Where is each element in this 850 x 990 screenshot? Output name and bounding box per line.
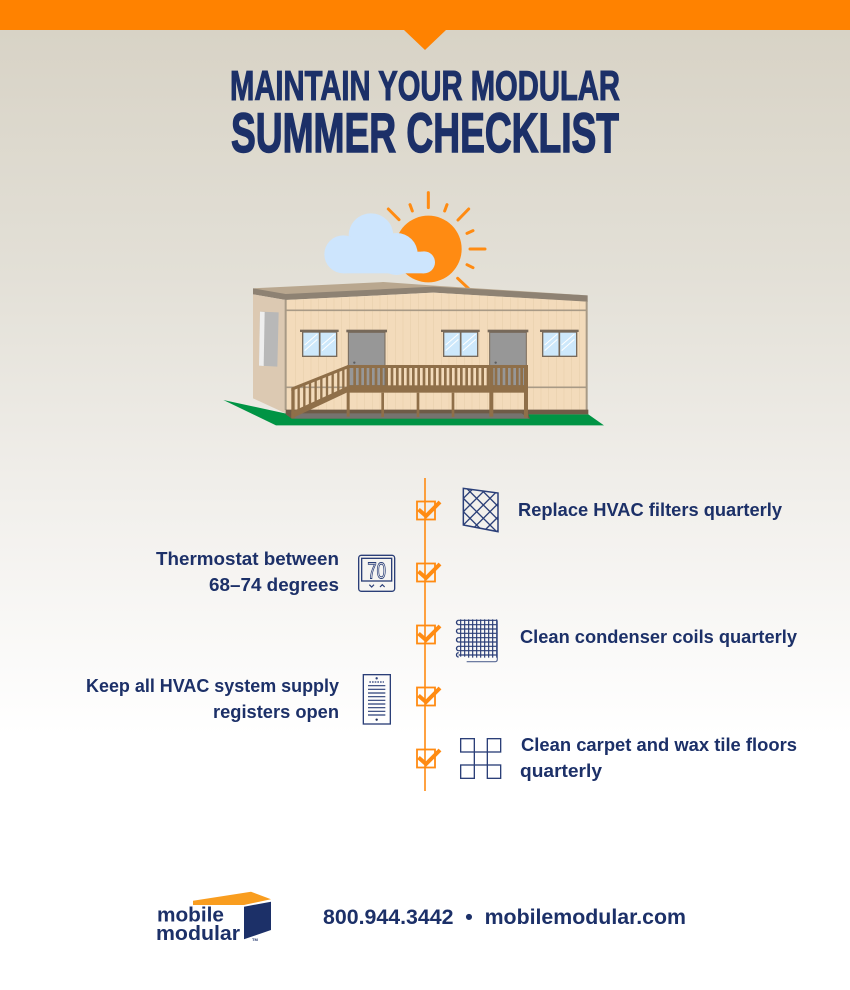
gradient backdrop [0,30,850,735]
icon: cloud [324,213,435,275]
item: thermostat: 68–74 degrees [209,574,339,595]
roof [253,282,588,302]
checkbox 1 [417,502,440,520]
timeline line [424,478,426,791]
illustration: modular building with sun and cloud [223,193,604,425]
left end wall [253,294,286,413]
contact line: 800.944.3442 • mobilemodular.com [323,905,686,929]
windows [300,330,579,356]
item: supply registers [86,675,340,722]
concrete strip [286,410,588,419]
deck and ramp railing [291,365,528,419]
item: thermostat [156,548,339,595]
checkbox 5 [417,750,440,768]
item: replace filters: Replace HVAC filters quarterly [518,499,783,520]
logo wordmark [156,904,240,945]
top orange banner with pointer [0,0,850,50]
icon: thermostat: 70 [367,558,386,584]
trademark mark: TM [252,937,258,942]
logo wordmark: mobile [157,904,224,926]
logo box [244,902,271,939]
title: SUMMER CHECKLIST [231,101,619,164]
side unit [259,312,279,367]
icon: supply register [363,675,390,724]
logo roof [193,892,271,905]
icon: sun [388,193,485,288]
logo wordmark: modular [156,922,240,945]
checkbox 3 [417,626,440,644]
title [230,62,620,164]
company logo [156,892,271,945]
item: thermostat: Thermostat between [156,548,339,569]
icon: thermostat [359,555,395,591]
icon: HVAC filter [462,488,499,533]
title: MAINTAIN YOUR MODULAR [230,62,620,109]
checkbox 2 [417,564,440,582]
checkbox 4 [417,688,440,706]
ground [223,400,604,425]
icon: condenser coil [456,619,497,662]
doors [346,330,528,386]
item: floors: quarterly [520,760,603,781]
front wall [286,293,587,410]
item: condenser coils: Clean condenser coils quarterly [520,626,798,647]
item: floors: Clean carpet and wax tile floors [521,734,797,755]
item: supply registers: Keep all HVAC system supply [86,675,340,696]
checklist checkboxes [417,502,440,768]
item: supply registers: registers open [213,701,339,722]
icon: floor tiles [461,739,501,778]
item: floors [520,734,797,781]
